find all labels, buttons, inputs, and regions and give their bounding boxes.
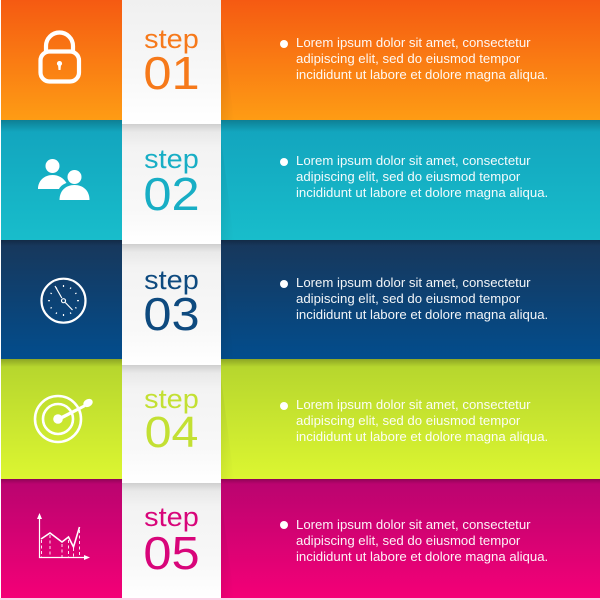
text block: step 03: adipiscing elit, sed do eiusmod tempor (296, 291, 520, 306)
card: step 03 (122, 244, 221, 365)
icon: line chart (37, 513, 90, 560)
text block: step 05 (280, 517, 548, 564)
panel: step 02 band (1, 120, 600, 240)
panel: step 01 band (1, 0, 600, 120)
heading: step 05 label: step (144, 502, 199, 532)
text block: step 04: adipiscing elit, sed do eiusmod tempor (296, 413, 520, 428)
card: step 04 (122, 365, 221, 483)
icon: target with dart (34, 394, 93, 444)
text block: step 02 (280, 153, 548, 200)
text block: step 03 (280, 275, 548, 322)
heading: step 02 label: step (144, 144, 199, 174)
panel: step 03 band (1, 240, 600, 359)
text block: step 03: Lorem ipsum dolor sit amet, consectetur (296, 275, 531, 290)
text block: step 01: adipiscing elit, sed do eiusmod tempor (296, 51, 520, 66)
text block: step 01 (280, 35, 548, 82)
number: 03: 03 (143, 288, 200, 340)
number: 05: 05 (143, 527, 200, 579)
card: step 01 (122, 0, 221, 124)
text block: step 01: Lorem ipsum dolor sit amet, consectetur (296, 35, 531, 50)
number: 04: 04 (145, 408, 198, 457)
icon: padlock (38, 30, 82, 84)
bottom edge line (0, 598, 600, 600)
icon: clock (40, 278, 87, 324)
heading: step 01 label: step (144, 24, 199, 54)
text block: step 05: adipiscing elit, sed do eiusmod tempor (296, 533, 520, 548)
heading: step 03 label: step (144, 265, 199, 295)
panel: step 04 band (1, 359, 600, 479)
text block: step 02: incididunt ut labore et dolore magna aliqua. (296, 185, 548, 200)
text block: step 01: incididunt ut labore et dolore magna aliqua. (296, 67, 548, 82)
text block: step 05: incididunt ut labore et dolore magna aliqua. (296, 549, 548, 564)
text block: step 04: incididunt ut labore et dolore magna aliqua. (296, 429, 548, 444)
text block: step 03: incididunt ut labore et dolore magna aliqua. (296, 307, 548, 322)
panel: step 05 band (1, 479, 600, 598)
text block: step 04: Lorem ipsum dolor sit amet, consectetur (296, 397, 531, 412)
card: step 05 (122, 483, 221, 598)
heading: step 04 label: step (144, 384, 199, 414)
text block: step 02: Lorem ipsum dolor sit amet, consectetur (296, 153, 531, 168)
card: step 02 (122, 124, 221, 244)
icon: two people (38, 159, 90, 200)
number: 01: 01 (143, 47, 200, 99)
number: 02: 02 (143, 168, 200, 220)
text block: step 04 (280, 397, 548, 444)
text block: step 02: adipiscing elit, sed do eiusmod tempor (296, 169, 520, 184)
text block: step 05: Lorem ipsum dolor sit amet, consectetur (296, 517, 531, 532)
